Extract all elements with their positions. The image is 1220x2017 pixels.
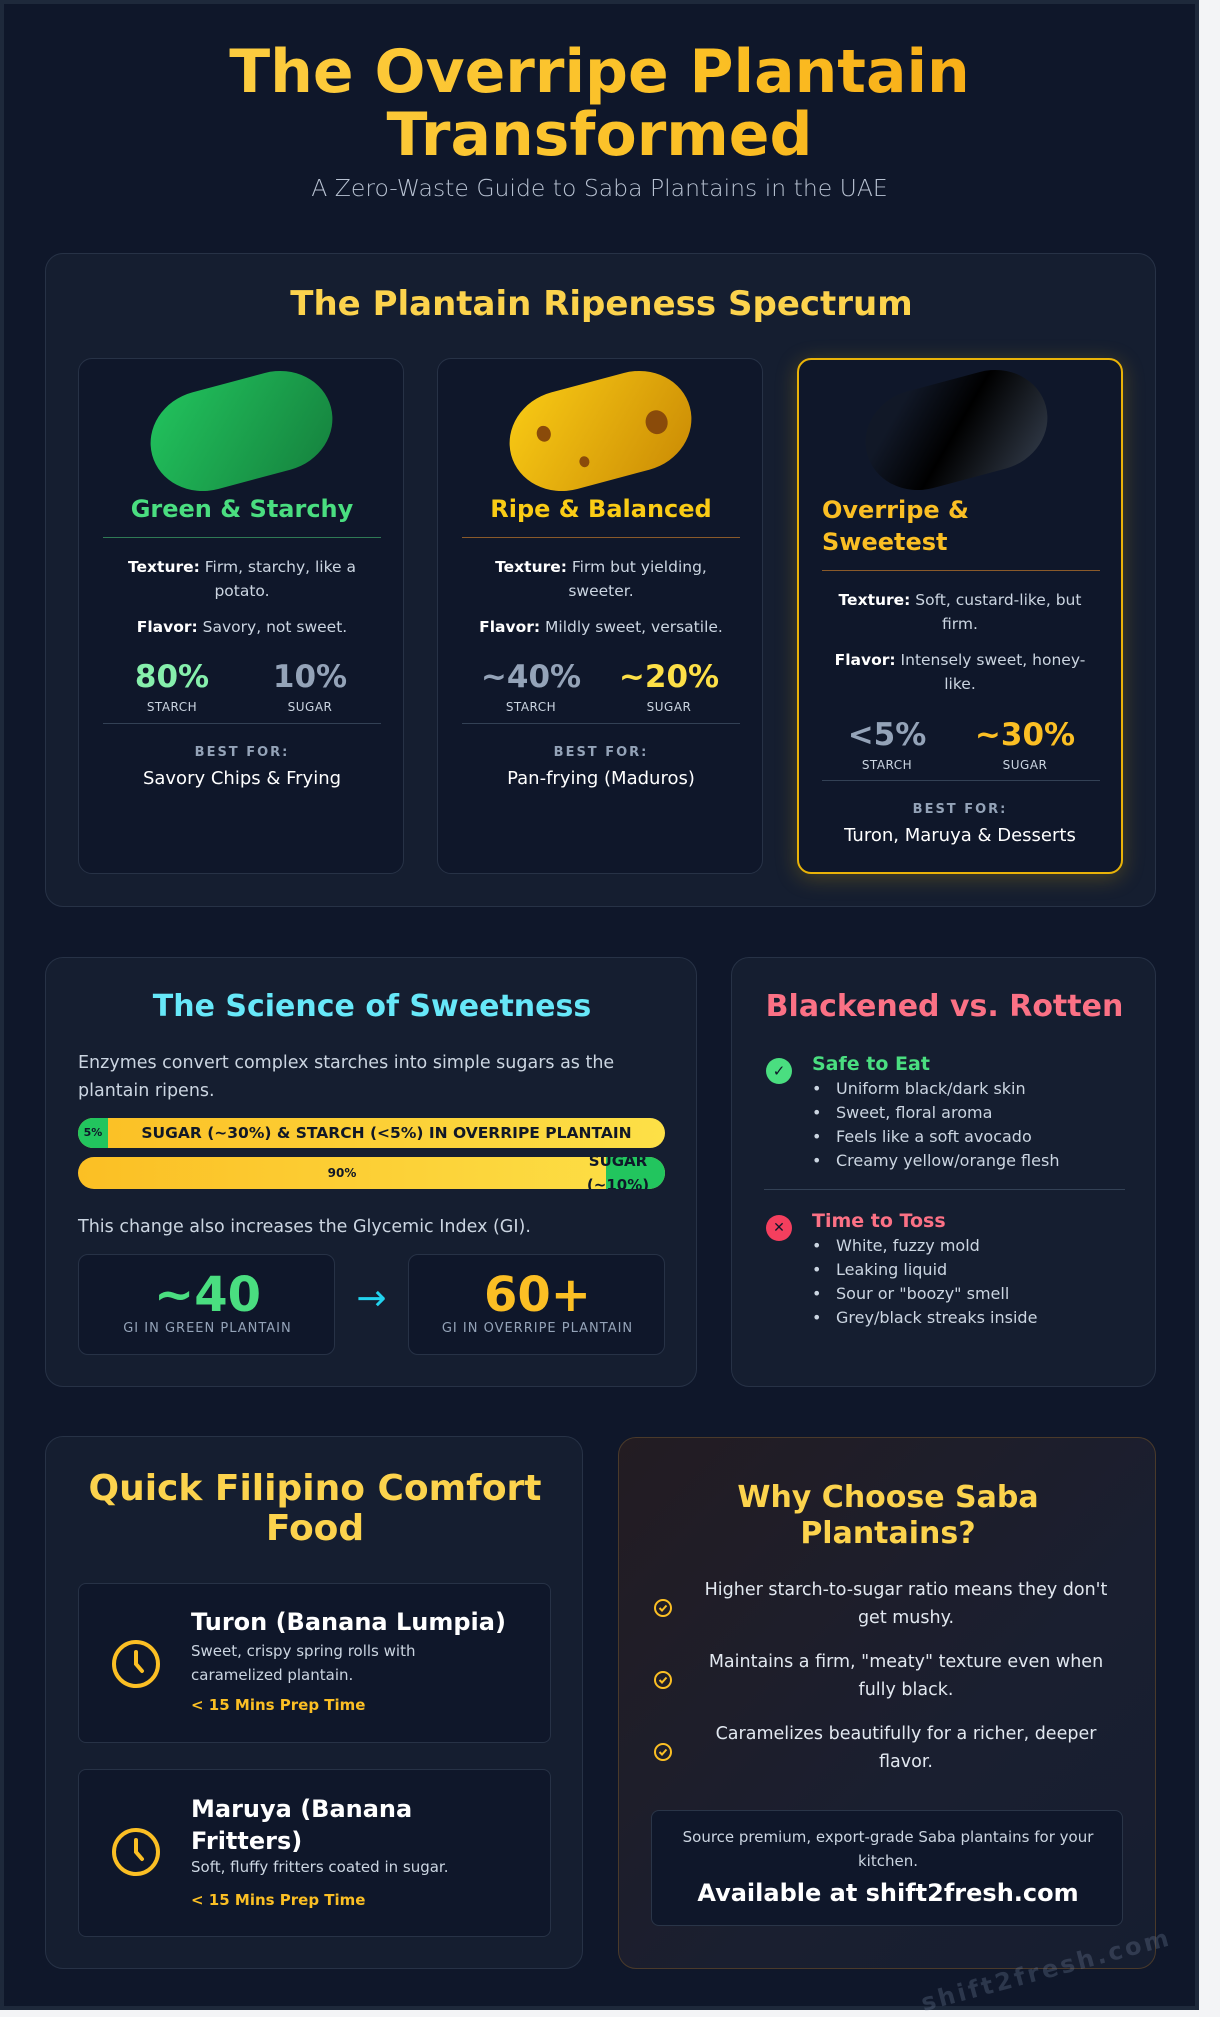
panel: blackened vs rotten: Uniform black/dark skin bbox=[836, 1079, 1026, 1098]
GI box overripe: GI IN OVERRIPE PLANTAIN bbox=[442, 1321, 633, 1336]
stats: STARCH bbox=[506, 700, 556, 714]
recipe card: maruya bbox=[78, 1769, 551, 1937]
icon: check: ✓ bbox=[773, 1062, 785, 1080]
heading: spectrum: The Plantain Ripeness Spectrum bbox=[290, 284, 913, 324]
callout: CTA: Available at shift2fresh.com bbox=[697, 1879, 1079, 1907]
best for: Pan-frying (Maduros) bbox=[507, 768, 695, 789]
stats: ~40% bbox=[481, 659, 581, 695]
card: green bbox=[78, 358, 404, 874]
GI box overripe bbox=[408, 1254, 665, 1355]
GI box green: ~40 bbox=[154, 1267, 261, 1323]
GI box overripe: 60+ bbox=[484, 1267, 591, 1323]
best for: Savory Chips & Frying bbox=[143, 768, 341, 789]
panel: quick filipino comfort food bbox=[45, 1436, 583, 1969]
panel: blackened vs rotten: White, fuzzy mold bbox=[836, 1236, 980, 1255]
card title bbox=[822, 496, 969, 556]
panel: blackened vs rotten bbox=[731, 957, 1156, 1387]
best for bbox=[507, 745, 695, 789]
stats: <5% bbox=[848, 717, 926, 753]
recipe card: turon: Turon (Banana Lumpia) bbox=[191, 1608, 506, 1636]
stats: ~30% bbox=[975, 717, 1075, 753]
benefit 3: Caramelizes beautifully for a richer, deeper flavor. bbox=[716, 1724, 1096, 1772]
best for bbox=[844, 802, 1076, 846]
watermark: shift2fresh.com bbox=[918, 1923, 1174, 2017]
GI box green: GI IN GREEN PLANTAIN bbox=[123, 1321, 292, 1336]
heading: comfort food: Quick Filipino Comfort bbox=[88, 1468, 542, 1509]
icon: black plantain bbox=[854, 358, 1059, 502]
heading: comfort food: Food bbox=[266, 1508, 364, 1549]
panel: science of sweetness bbox=[45, 957, 697, 1387]
bar chart: green bbox=[78, 1157, 665, 1189]
stats: ~20% bbox=[619, 659, 719, 695]
card title: Green & Starchy bbox=[131, 495, 353, 523]
panel: blackened vs rotten: Leaking liquid bbox=[836, 1260, 947, 1279]
card title: Overripe & bbox=[822, 496, 969, 524]
heading: why saba: Plantains? bbox=[800, 1516, 976, 1551]
panel: why choose saba bbox=[618, 1437, 1156, 1969]
heading: why saba: Why Choose Saba bbox=[737, 1480, 1039, 1515]
icon: check bbox=[766, 1058, 792, 1084]
benefit 1: Higher starch-to-sugar ratio means they don't get mushy. bbox=[705, 1580, 1107, 1628]
heading: science: The Science of Sweetness bbox=[153, 989, 591, 1024]
recipe card: maruya: Maruya (Banana Fritters) bbox=[191, 1795, 412, 1855]
stats bbox=[848, 717, 1075, 772]
bar chart: green: 90% bbox=[328, 1166, 356, 1180]
panel: blackened vs rotten: Creamy yellow/orange flesh bbox=[836, 1151, 1059, 1170]
stats: SUGAR bbox=[1003, 758, 1047, 772]
flavor text: Flavor: Savory, not sweet. bbox=[137, 618, 347, 636]
stats: SUGAR bbox=[647, 700, 691, 714]
card: overripe bbox=[797, 358, 1123, 874]
stats: 10% bbox=[273, 659, 347, 695]
title: Transformed bbox=[387, 100, 812, 170]
title bbox=[0, 41, 1199, 167]
GI box green bbox=[78, 1254, 335, 1355]
benefits list bbox=[654, 1580, 1107, 1772]
best for: BEST FOR: bbox=[195, 745, 289, 760]
recipe card: turon: < 15 Mins Prep Time bbox=[191, 1696, 366, 1714]
panel: blackened vs rotten: Safe to Eat bbox=[812, 1053, 930, 1075]
texture text: Texture: Firm, starchy, like a potato. bbox=[128, 558, 356, 600]
subtitle: A Zero-Waste Guide to Saba Plantains in the UAE bbox=[311, 174, 888, 202]
stats bbox=[135, 659, 347, 714]
best for: BEST FOR: bbox=[913, 802, 1007, 817]
toss section bbox=[766, 1210, 1037, 1327]
best for: Turon, Maruya & Desserts bbox=[844, 825, 1076, 846]
icon: green plantain bbox=[139, 359, 344, 503]
panel: blackened vs rotten: Sweet, floral aroma bbox=[836, 1103, 992, 1122]
recipe card: maruya: < 15 Mins Prep Time bbox=[191, 1891, 366, 1909]
bar chart: overripe: SUGAR (~30%) & STARCH (<5%) IN OVERRIPE PLANTAIN bbox=[141, 1124, 632, 1142]
card title: Ripe & Balanced bbox=[490, 495, 712, 523]
stats: STARCH bbox=[862, 758, 912, 772]
stats: 80% bbox=[135, 659, 209, 695]
icon: cross: ✕ bbox=[773, 1220, 785, 1236]
flavor text: Flavor: Intensely sweet, honey-like. bbox=[835, 651, 1085, 693]
icon: clock bbox=[112, 1828, 160, 1876]
safe section bbox=[766, 1053, 1059, 1170]
title: The Overripe Plantain bbox=[229, 37, 970, 107]
recipe card: maruya: Soft, fluffy fritters coated in sugar. bbox=[191, 1858, 448, 1876]
heading: comfort food bbox=[88, 1468, 542, 1549]
GI text: This change also increases the Glycemic Index (GI). bbox=[78, 1217, 531, 1237]
panel: blackened vs rotten: Feels like a soft avocado bbox=[836, 1127, 1032, 1146]
bar chart: overripe bbox=[78, 1118, 665, 1148]
callout: CTA bbox=[651, 1810, 1123, 1926]
icon: yellow plantain bbox=[498, 359, 703, 503]
stats: SUGAR bbox=[288, 700, 332, 714]
icon: cross bbox=[766, 1215, 792, 1241]
stats bbox=[481, 659, 719, 714]
benefit 2: Maintains a firm, "meaty" texture even when fully black. bbox=[709, 1652, 1103, 1700]
card title: Sweetest bbox=[822, 528, 948, 556]
card: ripe bbox=[437, 358, 763, 874]
recipe card: turon bbox=[78, 1583, 551, 1743]
icon: clock bbox=[112, 1640, 160, 1688]
texture text: Texture: Firm but yielding, sweeter. bbox=[495, 558, 707, 600]
bar chart: overripe: 5% bbox=[84, 1126, 102, 1139]
callout: CTA: Source premium, export-grade Saba plantains for your kitchen. bbox=[683, 1828, 1093, 1870]
paragraph: Enzymes convert complex starches into simple sugars as the plantain ripens. bbox=[78, 1053, 614, 1101]
best for: BEST FOR: bbox=[554, 745, 648, 760]
best for bbox=[143, 745, 341, 789]
panel: blackened vs rotten: Grey/black streaks inside bbox=[836, 1308, 1037, 1327]
stats: STARCH bbox=[147, 700, 197, 714]
texture text: Texture: Soft, custard-like, but firm. bbox=[839, 591, 1081, 633]
recipe card: turon: Sweet, crispy spring rolls with caramelized plantain. bbox=[191, 1642, 415, 1684]
heading: blackened: Blackened vs. Rotten bbox=[766, 989, 1123, 1024]
arrow: → bbox=[356, 1278, 387, 1319]
panel: blackened vs rotten: Time to Toss bbox=[812, 1210, 946, 1232]
heading: why saba bbox=[737, 1480, 1039, 1551]
panel: blackened vs rotten: Sour or "boozy" smell bbox=[836, 1284, 1009, 1303]
panel: ripeness spectrum bbox=[45, 253, 1156, 907]
flavor text: Flavor: Mildly sweet, versatile. bbox=[479, 618, 723, 636]
